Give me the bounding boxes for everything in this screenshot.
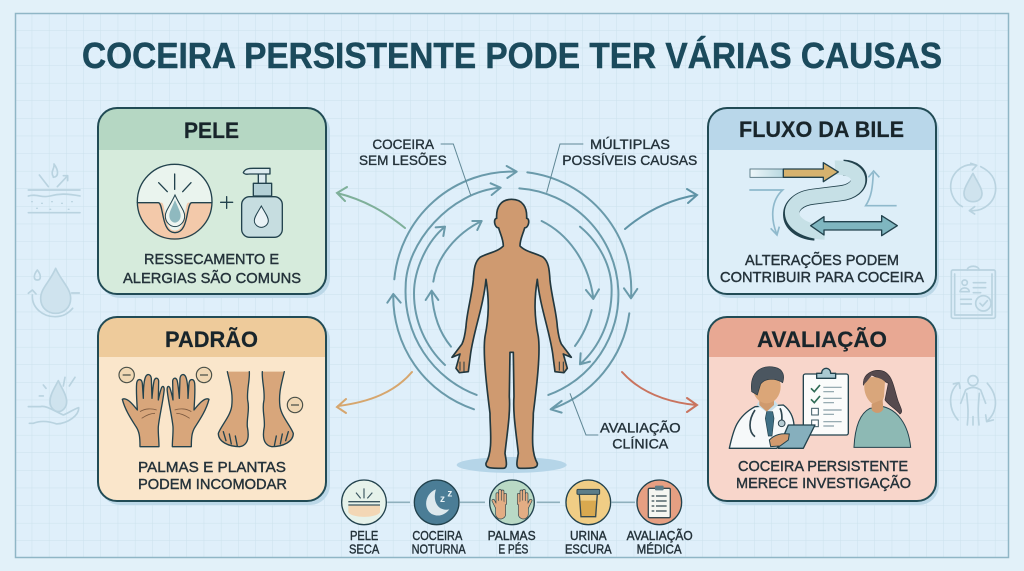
callout: coceira sem lesões bbox=[359, 136, 471, 195]
left side faint icons bbox=[28, 164, 80, 424]
item: avaliação médica: MÉDICA bbox=[637, 541, 682, 556]
text: padrão caption bbox=[138, 459, 287, 493]
text: avaliação caption: COCEIRA PERSISTENTE bbox=[738, 458, 908, 475]
icon: skin with droplet bbox=[28, 164, 80, 213]
item: pele seca: SECA bbox=[349, 541, 380, 556]
item: coceira noturna bbox=[412, 480, 466, 556]
heading: avaliação: AVALIAÇÃO bbox=[757, 327, 887, 352]
icon: clipboard bbox=[951, 266, 995, 318]
callout: múltiplas possíveis causas bbox=[547, 136, 697, 193]
text: pele caption: RESSECAMENTO E bbox=[144, 251, 279, 268]
right side faint icons bbox=[951, 163, 996, 425]
callout: coceira sem lesões: SEM LESÕES bbox=[359, 152, 447, 168]
central body diagram bbox=[359, 136, 697, 473]
arrow: to fluxo da bile bbox=[625, 189, 697, 229]
text: fluxo caption: CONTRIBUIR PARA COCEIRA bbox=[720, 269, 924, 286]
item: coceira noturna: z bbox=[440, 494, 445, 505]
heading: pele: PELE bbox=[184, 118, 239, 143]
text: fluxo caption bbox=[720, 252, 924, 286]
panel: avaliação bbox=[708, 317, 939, 505]
icon: hand with drop bbox=[28, 377, 79, 424]
panel: padrão bbox=[98, 317, 330, 505]
text: pele caption bbox=[123, 251, 301, 287]
panel: pele bbox=[98, 108, 330, 298]
item: coceira noturna: z bbox=[447, 489, 452, 500]
heading: fluxo da bile: FLUXO DA BILE bbox=[739, 117, 904, 142]
item: palmas e pés: E PÉS bbox=[498, 541, 529, 556]
icon: water drop cycle bbox=[28, 268, 79, 317]
item: coceira noturna: NOTURNA bbox=[412, 541, 466, 556]
heading: padrão: PADRÃO bbox=[165, 327, 258, 352]
callout: avaliação clínica: CLÍNICA bbox=[612, 435, 669, 451]
item: urina escura: ESCURA bbox=[565, 541, 612, 556]
text: avaliação caption bbox=[736, 458, 911, 492]
icon: clipboard checklist bbox=[803, 368, 848, 435]
icon: doctor bbox=[729, 367, 815, 448]
circular arrows bbox=[387, 166, 637, 413]
callout: coceira sem lesões: COCEIRA bbox=[372, 136, 435, 152]
callout: múltiplas possíveis causas: MÚLTIPLAS bbox=[590, 136, 670, 152]
text: avaliação caption: MERECE INVESTIGAÇÃO bbox=[736, 475, 911, 492]
panel: fluxo da bile bbox=[708, 108, 939, 298]
callout: múltiplas possíveis causas: POSSÍVEIS CAUSAS bbox=[562, 152, 697, 168]
text: padrão caption: PODEM INCOMODAR bbox=[138, 476, 287, 493]
item: avaliação médica: AVALIAÇÃO bbox=[627, 528, 693, 543]
icon: pele skin and moisturizer bbox=[137, 164, 282, 240]
title: COCEIRA PERSISTENTE PODE TER VÁRIAS CAUSAS bbox=[82, 35, 942, 76]
item: coceira noturna: COCEIRA bbox=[412, 528, 463, 543]
arrow: to pele bbox=[337, 187, 405, 228]
item: avaliação médica bbox=[627, 480, 693, 556]
item: pele seca: PELE bbox=[350, 528, 379, 543]
icon: drop in cycle bbox=[951, 163, 996, 214]
icon: doctor, checklist and patient bbox=[729, 367, 911, 448]
icon: palms and soles bbox=[119, 367, 303, 447]
item: palmas e pés bbox=[488, 480, 536, 556]
human figure bbox=[452, 199, 571, 468]
text: padrão caption: PALMAS E PLANTAS bbox=[138, 459, 286, 476]
item: palmas e pés: PALMAS bbox=[488, 528, 536, 543]
icon: patient bbox=[854, 370, 911, 447]
item: urina escura bbox=[565, 480, 612, 556]
arrow: to padrão bbox=[337, 372, 412, 413]
icon: body with arrows bbox=[951, 376, 995, 425]
icon: bile flow bbox=[749, 163, 897, 236]
text: pele caption: ALERGIAS SÃO COMUNS bbox=[123, 270, 301, 287]
callout: avaliação clínica bbox=[570, 393, 681, 451]
callout: avaliação clínica: AVALIAÇÃO bbox=[600, 419, 681, 435]
text: fluxo caption: ALTERAÇÕES PODEM bbox=[745, 252, 899, 269]
foot shadow bbox=[457, 457, 567, 473]
item: pele seca bbox=[342, 480, 386, 556]
bottom symptom timeline bbox=[342, 480, 693, 556]
item: urina escura: URINA bbox=[570, 528, 607, 543]
arrow: to avaliação bbox=[622, 372, 697, 412]
